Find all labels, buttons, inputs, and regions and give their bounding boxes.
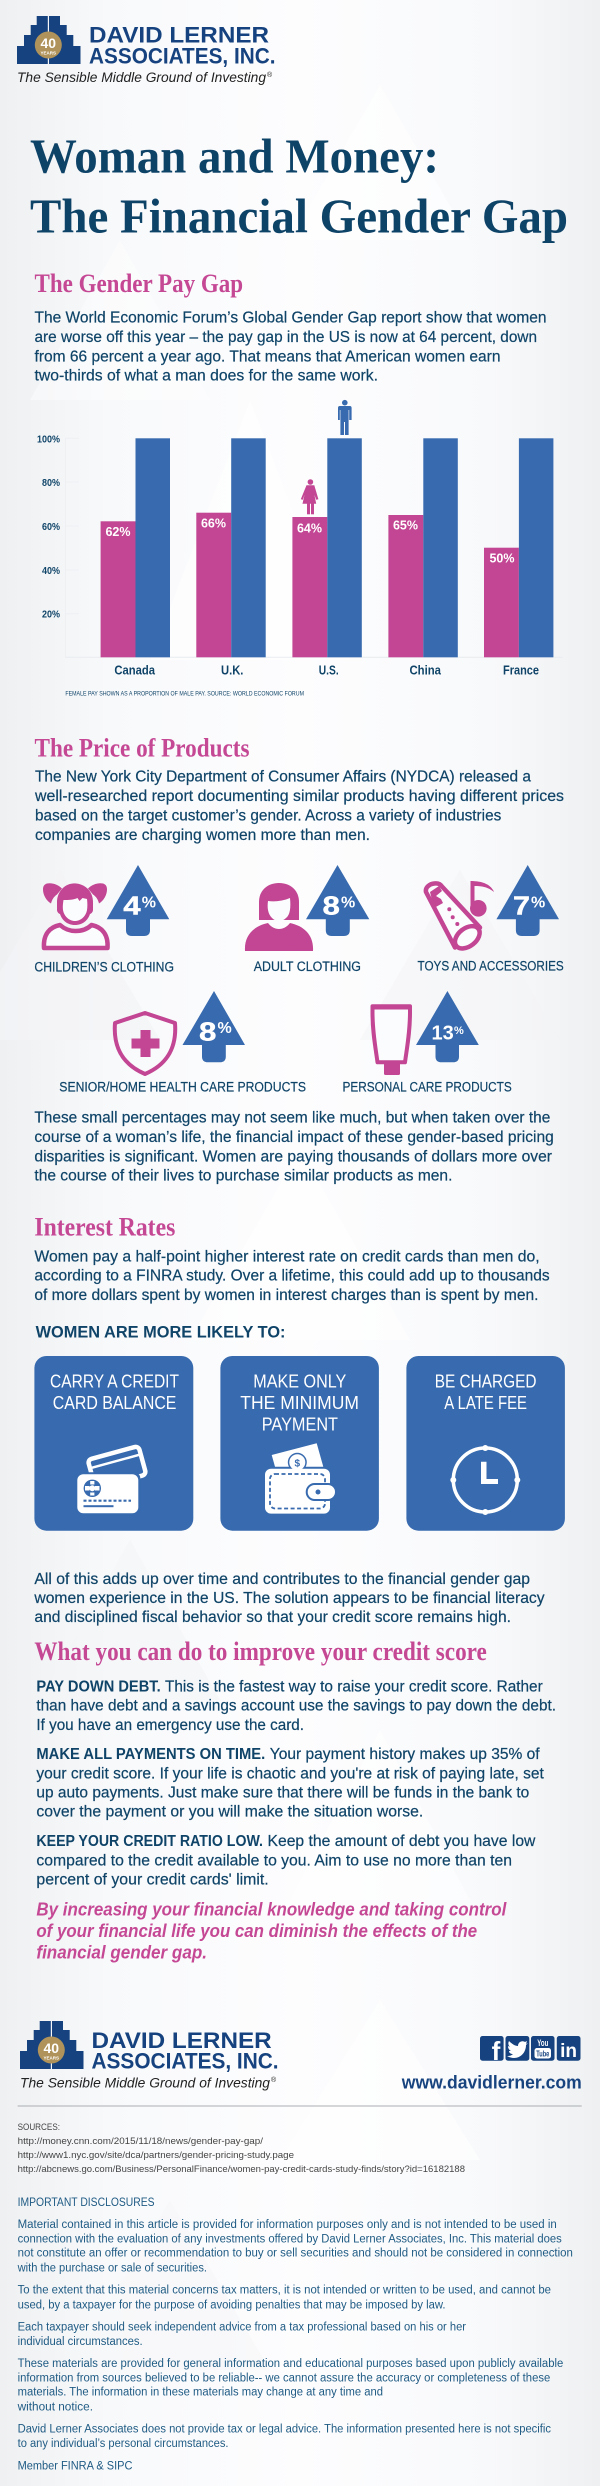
- icon: clock: [450, 1445, 520, 1515]
- tip: make all payments on time: up auto payments. Just make sure that there will be funds in the bank to: [36, 1785, 529, 1802]
- card: make only the minimum payment: [220, 1356, 379, 1531]
- bars: U.K.: [196, 438, 266, 657]
- bars: Canada: [101, 438, 170, 657]
- icon: medical shield: [115, 1013, 175, 1074]
- text block: gender pay gap intro: The World Economic Forum’s Global Gender Gap report show that women: [34, 310, 546, 327]
- disclosure paragraph 2: [18, 2285, 551, 2311]
- arrow: 8 percent: [182, 991, 245, 1062]
- tip: keep your credit ratio low: [36, 1833, 536, 1888]
- title: Woman and Money:: [30, 130, 439, 183]
- tip: make all payments on time: Your payment history makes up 35% of: [270, 1746, 540, 1763]
- text block: small percentages: [34, 1110, 554, 1185]
- disclosure paragraph 3: [18, 2322, 466, 2348]
- price item: children's clothing: [34, 865, 174, 975]
- arrow: 7 percent: [496, 865, 559, 936]
- tip: pay down debt: If you have an emergency use the card.: [36, 1717, 304, 1734]
- disclosure paragraph 4: information from sources believed to be reliable-- we cannot assure the accuracy or completeness of these: [18, 2372, 550, 2384]
- company name: [89, 23, 276, 68]
- icon: youtube: You: [537, 2038, 548, 2048]
- bars: France: 50%: [489, 551, 515, 565]
- country labels: Canada: [114, 663, 156, 678]
- sources: [18, 2122, 465, 2175]
- disclosure paragraph 1: not constitute an offer or recommendation to buy or sell securities and should not be considered in connection: [18, 2248, 573, 2260]
- text block: price of products intro: [34, 769, 564, 844]
- bars: France: [484, 438, 553, 657]
- logo: footer David Lerner Associates: [20, 2021, 279, 2090]
- disclosure paragraph 3: Each taxpayer should seek independent advice from a tax professional based on his or her: [18, 2322, 466, 2334]
- disclosure paragraph 5: to any individual’s personal circumstances.: [18, 2438, 228, 2450]
- tagline: ®: [267, 71, 273, 79]
- arrow: 4 percent: %: [142, 894, 156, 911]
- text block: small percentages: course of a woman’s life, the financial impact of these gender-based pricing: [34, 1129, 554, 1146]
- disclosure paragraph 4: [17, 2358, 563, 2413]
- text block: price of products intro: The New York City Department of Consumer Affairs (NYDCA) released a: [35, 769, 531, 786]
- country labels: [114, 663, 539, 678]
- disclosure paragraph 5: [18, 2424, 551, 2450]
- tip: make all payments on time: your credit score. If your life is chaotic and you're at risk of paying late, set: [36, 1765, 544, 1782]
- text block: all of this adds up: and disciplined fiscal behavior so that your credit score remains high.: [34, 1609, 511, 1626]
- arrow: 8 percent: [306, 865, 369, 936]
- company name: ASSOCIATES, INC.: [92, 2048, 279, 2073]
- arrow: 8 percent: %: [341, 894, 355, 911]
- disclosure paragraph 4: materials. The information in these materials may change at any time and: [18, 2387, 383, 2399]
- tip: keep your credit ratio low: KEEP YOUR CREDIT RATIO LOW.: [36, 1833, 263, 1850]
- text block: gender pay gap intro: from 66 percent a year ago. That means that American women earn: [34, 348, 500, 365]
- closing callout: of your financial life you can diminish the effects of the: [36, 1921, 477, 1941]
- bar chart: female pay as a proportion of male pay: [37, 400, 562, 698]
- arrow: 8 percent: 8: [199, 1016, 216, 1046]
- social icons: [480, 2036, 580, 2066]
- icon: woman bust: [245, 883, 313, 951]
- label: ADULT CLOTHING: [254, 959, 361, 974]
- logo: David Lerner Associates header: [17, 16, 276, 85]
- disclosure paragraph 4: without notice.: [17, 2401, 93, 2413]
- closing callout: By increasing your financial knowledge and taking control: [36, 1899, 507, 1919]
- tip: pay down debt: [36, 1678, 556, 1734]
- card: be charged a late fee: A LATE FEE: [444, 1392, 527, 1413]
- tip: make all payments on time: [36, 1746, 544, 1821]
- disclosures heading: IMPORTANT DISCLOSURES: [18, 2197, 155, 2209]
- icon: tube: [372, 1004, 410, 1075]
- disclosure paragraph 1: [17, 2219, 573, 2274]
- bars: China: 65%: [393, 519, 418, 533]
- country labels: China: [410, 663, 442, 678]
- disclosure paragraph 2: used, by a taxpayer for the purpose of avoiding penalties that may be imposed by law.: [18, 2299, 445, 2311]
- icon: man: [338, 400, 352, 435]
- country labels: U.S.: [319, 663, 339, 678]
- arrow: 13 percent: [416, 991, 479, 1062]
- logo mark: stepped building with 40 years seal: 40: [44, 2040, 59, 2056]
- icon: wallet with cash: [265, 1443, 336, 1514]
- card: be charged a late fee: BE CHARGED: [435, 1371, 536, 1392]
- disclosure paragraph 4: These materials are provided for general information and educational purposes based upon publicly available: [18, 2358, 563, 2370]
- icon: youtube: Tube: [536, 2050, 550, 2058]
- bars: U.S.: 64%: [297, 522, 322, 536]
- bars: U.K.: 66%: [201, 516, 226, 530]
- heading: what you can do: What you can do to improve your credit score: [34, 1637, 487, 1666]
- tip: make all payments on time: cover the payment or you will make the situation worse.: [36, 1804, 423, 1821]
- closing callout: financial gender gap.: [36, 1943, 207, 1963]
- arrow: 7 percent: %: [531, 894, 545, 911]
- country labels: France: [503, 663, 539, 678]
- text block: all of this adds up: women experience in the US. The solution appears to be financial literacy: [33, 1590, 545, 1607]
- tip: keep your credit ratio low: percent of your credit cards' limit.: [36, 1871, 269, 1888]
- price item: toys and accessories: [418, 865, 564, 973]
- company name: ASSOCIATES, INC.: [89, 43, 276, 68]
- icon: credit cards: [75, 1446, 146, 1515]
- member line: Member FINRA & SIPC: [18, 2460, 132, 2472]
- tip: keep your credit ratio low: Keep the amount of debt you have low: [268, 1833, 536, 1850]
- title: The Financial Gender Gap: [30, 190, 568, 243]
- arrow: 8 percent: 8: [322, 890, 340, 920]
- text block: interest rates intro: [34, 1248, 550, 1304]
- bars: China: [388, 438, 458, 657]
- card: carry a credit card balance: [34, 1356, 193, 1531]
- y axis labels: 100%: [37, 433, 61, 445]
- website url: www.davidlerner.com: [401, 2071, 582, 2092]
- card: carry a credit card balance: CARRY A CREDIT: [50, 1371, 179, 1392]
- heading: The Gender Pay Gap: The Gender Pay Gap: [34, 269, 243, 298]
- important disclosures: [17, 2197, 573, 2472]
- logo mark: stepped building with 40 years seal: YEARS: [41, 50, 56, 56]
- sources: http://money.cnn.com/2015/11/18/news/gender-pay-gap/: [18, 2136, 263, 2147]
- arrow: 4 percent: 4: [123, 890, 141, 920]
- sources: http://abcnews.go.com/Business/PersonalFinance/women-pay-credit-cards-study-finds/story?id=16182188: [18, 2164, 465, 2175]
- company name: DAVID LERNER: [92, 2028, 272, 2053]
- arrow: 7 percent: 7: [513, 890, 530, 920]
- text block: price of products intro: well-researched report documenting similar products having different prices: [34, 788, 564, 805]
- disclosure paragraph 5: David Lerner Associates does not provide tax or legal advice. The information presented here is not specific: [18, 2424, 551, 2436]
- price item: adult clothing: [245, 865, 369, 974]
- bars: U.S.: [292, 438, 362, 657]
- tip: pay down debt: than have debt and a savings account use the savings to pay down the debt.: [36, 1698, 556, 1715]
- text block: price of products intro: companies are charging women more than men.: [35, 827, 370, 844]
- card: make only the minimum payment: MAKE ONLY: [253, 1371, 346, 1392]
- icon: wallet with cash: $: [295, 1458, 301, 1470]
- tip: pay down debt: This is the fastest way to raise your credit score. Rather: [165, 1678, 543, 1695]
- arrow: 8 percent: %: [218, 1020, 232, 1037]
- price item: personal care products: [342, 991, 512, 1095]
- arrow: 13 percent: %: [454, 1025, 464, 1037]
- logo mark: stepped building with 40 years seal: YEARS: [44, 2056, 59, 2060]
- subheading: women are more likely to: WOMEN ARE MORE LIKELY TO:: [36, 1322, 285, 1341]
- icon: toy trumpet and music note: [426, 881, 494, 953]
- tagline: The Sensible Middle Ground of Investing: [20, 2075, 271, 2090]
- disclosure paragraph 1: connection with the evaluation of any investments offered by David Lerner Associates, Inc. This material does: [18, 2233, 562, 2245]
- text block: interest rates intro: Women pay a half-point higher interest rate on credit cards than men do,: [34, 1248, 540, 1265]
- price item: senior/home health care products: [59, 991, 306, 1095]
- icon: twitter: [506, 2036, 529, 2061]
- logo mark: stepped building with 40 years seal: 40: [41, 35, 56, 51]
- text block: interest rates intro: according to a FINRA study. Over a lifetime, this could add up to thousands: [34, 1268, 550, 1285]
- tip: keep your credit ratio low: compared to the credit available to you. Aim to use no more than ten: [36, 1852, 512, 1869]
- label: CHILDREN’S CLOTHING: [34, 960, 174, 975]
- icon: linkedin: in: [560, 2041, 577, 2062]
- text block: small percentages: These small percentages may not seem like much, but when taken over the: [34, 1110, 550, 1127]
- text block: all of this adds up: All of this adds up over time and contributes to the financial gender gap: [34, 1571, 530, 1588]
- icon: facebook: f: [492, 2036, 501, 2066]
- card: be charged a late fee: [406, 1356, 565, 1531]
- icon: girl with pigtails: [43, 883, 108, 948]
- disclosure paragraph 1: Material contained in this article is provided for information purposes only and is not intended to be used in: [18, 2219, 557, 2231]
- label: PERSONAL CARE PRODUCTS: [342, 1080, 512, 1095]
- tagline: The Sensible Middle Ground of Investing: [17, 70, 267, 85]
- text block: interest rates intro: of more dollars spent by women in interest charges than is spent by men.: [34, 1287, 539, 1304]
- label: SENIOR/HOME HEALTH CARE PRODUCTS: [59, 1080, 306, 1095]
- tip: pay down debt: PAY DOWN DEBT.: [36, 1678, 161, 1695]
- y axis labels: 40%: [42, 565, 61, 577]
- text block: small percentages: the course of their lives to purchase similar products as men.: [34, 1168, 452, 1185]
- y axis labels: 60%: [42, 521, 61, 533]
- disclosure paragraph 1: with the purchase or sale of securities.: [17, 2262, 207, 2274]
- tip: make all payments on time: MAKE ALL PAYMENTS ON TIME.: [36, 1746, 265, 1763]
- text block: all of this adds up: [33, 1571, 545, 1626]
- card: carry a credit card balance: CARD BALANCE: [53, 1392, 176, 1413]
- text block: gender pay gap intro: two-thirds of what a man does for the same work.: [34, 368, 378, 385]
- company name: [92, 2028, 279, 2073]
- arrow: 13 percent: 13: [432, 1022, 454, 1044]
- arrow: 4 percent: [107, 865, 169, 936]
- text block: gender pay gap intro: [34, 310, 546, 385]
- icon: youtube: [531, 2036, 554, 2061]
- card: make only the minimum payment: THE MINIMUM: [240, 1392, 359, 1413]
- disclosure paragraph 2: To the extent that this material concerns tax matters, it is not intended or written to be used, and cannot be: [18, 2285, 551, 2297]
- text block: price of products intro: based on the target customer’s gender. Across a variety of industries: [35, 808, 502, 825]
- logo mark: stepped building with 40 years seal: [17, 16, 80, 64]
- y axis labels: 80%: [42, 477, 61, 489]
- heading: The Price of Products: The Price of Products: [34, 734, 250, 763]
- text block: gender pay gap intro: are worse off this year – the pay gap in the US is now at 64 percent, down: [34, 329, 537, 346]
- chart footnote: FEMALE PAY SHOWN AS A PROPORTION OF MALE PAY. SOURCE: WORLD ECONOMIC FORUM: [65, 692, 304, 698]
- icon: woman: [301, 479, 318, 514]
- card: make only the minimum payment: PAYMENT: [262, 1413, 338, 1434]
- text block: small percentages: disparities is significant. Women are paying thousands of dollars more over: [34, 1148, 552, 1165]
- y axis labels: 20%: [42, 609, 61, 621]
- country labels: U.K.: [221, 663, 243, 678]
- bars: Canada: 62%: [105, 525, 131, 539]
- sources: SOURCES:: [18, 2122, 60, 2133]
- company name: DAVID LERNER: [89, 23, 269, 48]
- y axis labels: [37, 433, 61, 621]
- title: [30, 130, 568, 243]
- closing callout: [36, 1899, 507, 1963]
- sources: http://www1.nyc.gov/site/dca/partners/gender-pricing-study.page: [18, 2150, 294, 2161]
- label: TOYS AND ACCESSORIES: [418, 958, 564, 973]
- logo mark: stepped building with 40 years seal: [20, 2021, 84, 2069]
- heading: Interest Rates: Interest Rates: [34, 1212, 175, 1241]
- tagline: ®: [271, 2076, 277, 2084]
- disclosure paragraph 3: individual circumstances.: [18, 2336, 143, 2348]
